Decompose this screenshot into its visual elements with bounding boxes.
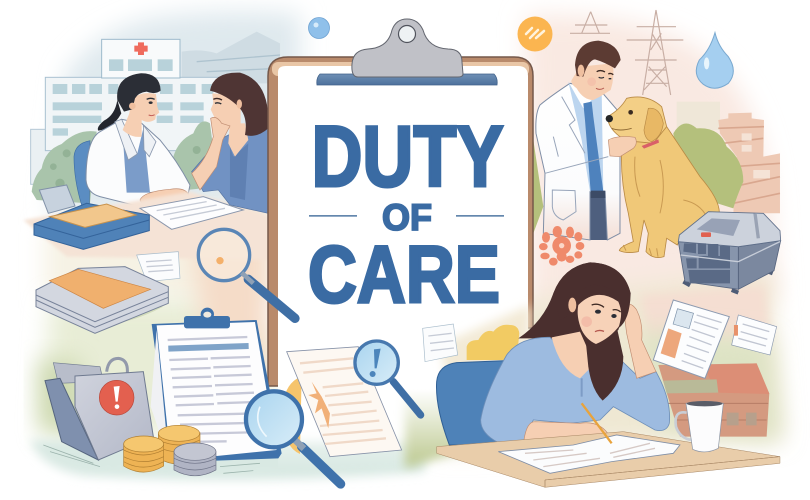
- pinned note: [137, 252, 180, 282]
- report with chart: [653, 300, 729, 378]
- large magnifying glass: [246, 391, 341, 484]
- small magnifier with exclamation: [355, 341, 421, 415]
- coin stacks: [124, 425, 216, 476]
- woman body: [481, 262, 670, 445]
- bush: [673, 124, 743, 208]
- power pylons: [570, 10, 683, 95]
- brick building: [658, 363, 769, 437]
- buildings: [677, 102, 780, 213]
- red warning badge: [99, 380, 134, 415]
- coffee mug: [676, 401, 723, 452]
- orange sun shape behind paper: [283, 377, 302, 454]
- patient woman: [192, 73, 268, 213]
- water drop: [696, 33, 733, 88]
- hospital building: [31, 32, 280, 184]
- incident report paper: [287, 347, 402, 457]
- paper lower wash: [440, 305, 530, 395]
- woman hair back: [518, 262, 631, 350]
- blue chair: [436, 361, 507, 445]
- paper stack with orange folder: [36, 267, 168, 333]
- doctor chair: [74, 141, 90, 205]
- clipboard with title: [268, 19, 533, 470]
- heading: CARE: CARE: [308, 230, 500, 320]
- metal bar: [317, 74, 497, 85]
- vet: [536, 41, 621, 240]
- ground shadow strokes: [43, 445, 260, 473]
- pet carrier: [678, 212, 781, 293]
- woman face: [553, 262, 631, 344]
- floating blue bubble: [308, 18, 330, 38]
- document clipboard: [151, 308, 282, 461]
- magnifying glass on table: [198, 229, 295, 318]
- heading: DUTY: DUTY: [312, 109, 504, 205]
- orange flower: [539, 226, 584, 266]
- open book: [498, 435, 680, 473]
- paper: [278, 66, 528, 470]
- patient paper: [140, 197, 243, 229]
- table: [23, 192, 268, 260]
- blue folder stack: [34, 203, 149, 249]
- pencil: [582, 403, 612, 443]
- scene: desk items lower left: [36, 229, 421, 484]
- woman right hair lock: [586, 327, 623, 401]
- scene: vet and dog: [533, 10, 780, 266]
- doctor: [86, 73, 190, 207]
- desk: [437, 432, 780, 487]
- pinned note left: [423, 324, 458, 362]
- bushes: [32, 121, 218, 203]
- clip: [352, 19, 463, 77]
- golden retriever: [606, 97, 719, 258]
- metal document bag: [45, 358, 153, 460]
- yellow flowers: [467, 325, 519, 360]
- scene: woman studying at desk: [423, 262, 780, 487]
- photo frame: [39, 185, 75, 213]
- note right: [732, 315, 777, 355]
- scene: doctor consultation with hospital: [23, 32, 280, 260]
- floating orange coin: [518, 16, 552, 52]
- board: [268, 57, 533, 386]
- heading: OF: OF: [382, 197, 432, 238]
